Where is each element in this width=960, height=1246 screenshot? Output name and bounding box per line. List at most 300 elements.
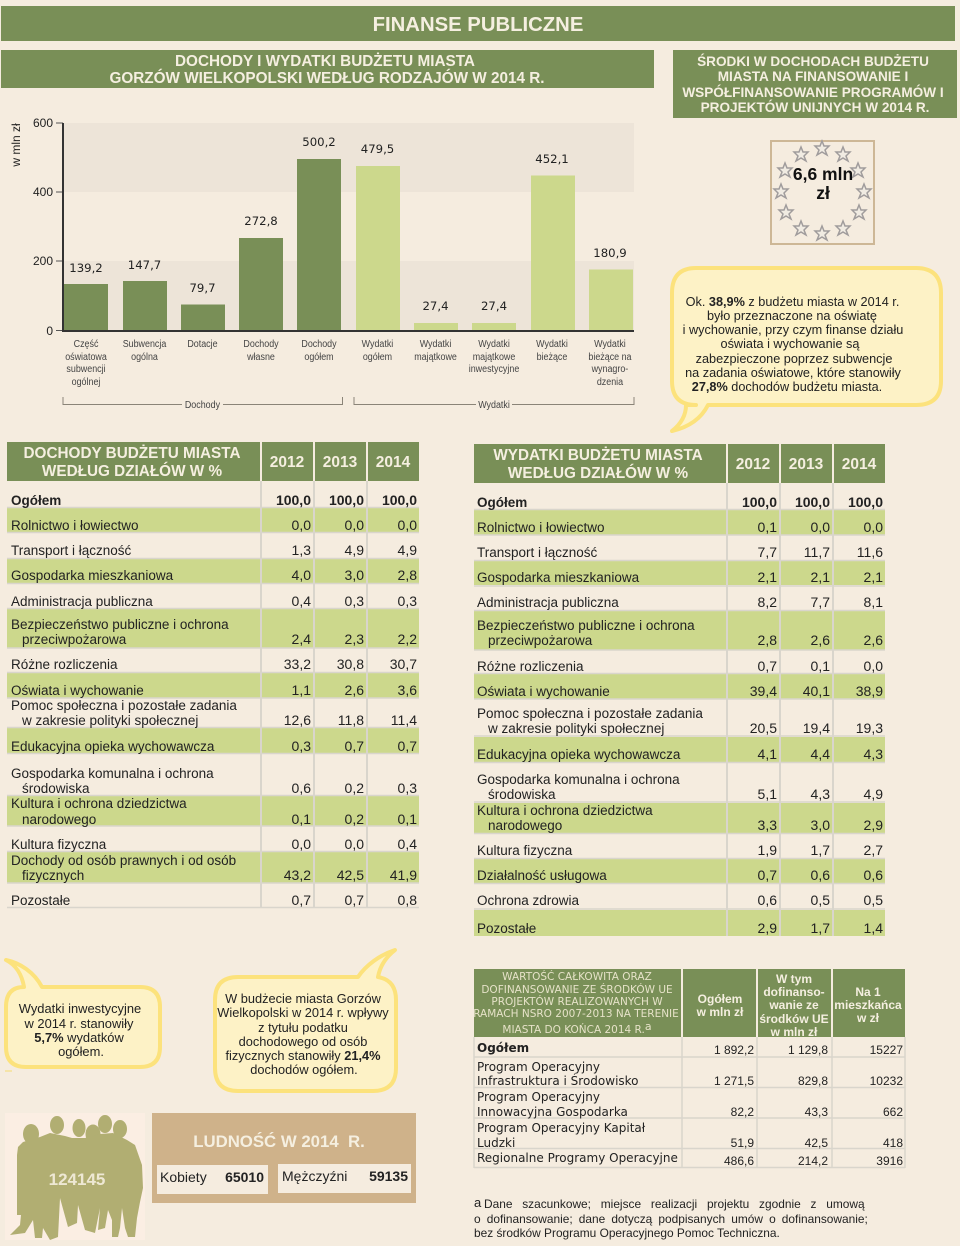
row: Różne rozliczenia: 0,1 xyxy=(811,658,830,674)
table header: WEDŁUG DZIAŁÓW W % xyxy=(42,462,222,480)
row: Kultura i ochrona: 0,1 xyxy=(292,811,311,827)
row: Bezpieczeństwo: Bezpieczeństwo publiczne i ochrona xyxy=(11,617,229,632)
table header: 2012 xyxy=(736,456,770,473)
row: Innowacyjna: 82,2 xyxy=(731,1105,754,1119)
row: Ogółem: 100,0 xyxy=(329,492,364,508)
row: Ogółem: 1 129,8 xyxy=(788,1043,828,1057)
row: Działalność usługowa: 0,6 xyxy=(811,867,830,883)
row: Infrastruktura: 1 271,5 xyxy=(714,1074,754,1088)
category labels xyxy=(65,338,632,388)
row: Gospodarka mieszkaniowa: 4,0 xyxy=(292,567,311,583)
row: Gospodarka komunalna: środowiska xyxy=(22,781,90,796)
row: Ogółem xyxy=(11,492,417,508)
row: Gospodarka mieszkaniowa: Gospodarka mieszkaniowa xyxy=(477,570,640,585)
category labels: bieżące na xyxy=(588,351,632,363)
bar values: 139,2 xyxy=(69,261,103,275)
row: Różne rozliczenia: Różne rozliczenia xyxy=(11,657,118,672)
row: Rolnictwo: 0,0 xyxy=(345,517,364,533)
men count xyxy=(278,1164,411,1193)
panel: population silhouette xyxy=(5,1113,145,1240)
bar values: 79,7 xyxy=(189,281,216,295)
bar values: 147,7 xyxy=(128,258,161,272)
row: Ogółem: 100,0 xyxy=(795,494,830,510)
row: Ochrona zdrowia: 0,5 xyxy=(864,892,883,908)
table header: 2013 xyxy=(789,456,824,473)
callout: education share xyxy=(672,268,941,431)
row: Rolnictwo: 0,0 xyxy=(292,517,311,533)
callout: income tax xyxy=(215,950,396,1091)
category labels: Wydatki xyxy=(594,338,626,350)
callout: education share: na zadania oświatowe, które stanowiły xyxy=(685,366,902,380)
bar values: 180,9 xyxy=(593,246,627,260)
row: Innowacyjna: 662 xyxy=(883,1105,903,1119)
row: Ogółem: Ogółem xyxy=(477,1041,529,1055)
row: Działalność usługowa: 0,7 xyxy=(758,867,777,883)
row: Oświata: 1,1 xyxy=(292,682,311,698)
bracket: Dochody: Dochody xyxy=(185,399,220,411)
row: Kultura fizyczna: 0,4 xyxy=(398,836,417,852)
row: Oświata xyxy=(11,682,417,698)
row: Ochrona zdrowia: Ochrona zdrowia xyxy=(477,893,580,908)
heading: EU funds: PROJEKTÓW UNIJNYCH W 2014 R. xyxy=(701,100,929,115)
row: Pozostałe xyxy=(477,920,883,936)
row: Pomoc społeczna: 19,4 xyxy=(803,720,830,736)
row: Kultura fizyczna: 0,0 xyxy=(292,836,311,852)
panel: population xyxy=(152,1113,416,1203)
row: Gospodarka mieszkaniowa xyxy=(477,569,883,585)
row: Różne rozliczenia: 30,8 xyxy=(337,656,364,672)
panel: population: LUDNOŚĆ W 2014 R. xyxy=(193,1132,365,1151)
category labels: bieżące xyxy=(537,351,567,363)
row: Innowacyjna: Program Operacyjny xyxy=(477,1090,600,1104)
table header: 2014 xyxy=(376,454,411,471)
row: Transport xyxy=(11,542,417,558)
row: Kultura i ochrona: 0,2 xyxy=(345,811,364,827)
amount: zł xyxy=(816,183,830,203)
category labels: oświatowa xyxy=(65,351,107,363)
category labels: inwestycyjne xyxy=(469,363,519,375)
row: Ogółem xyxy=(477,494,883,510)
row: Rolnictwo xyxy=(11,517,417,533)
row: Bezpieczeństwo: Bezpieczeństwo publiczne i ochrona xyxy=(477,618,695,633)
table header: 2012 xyxy=(270,454,304,471)
row: Innowacyjna: Innowacyjna Gospodarka xyxy=(477,1105,628,1119)
row: Oświata: Oświata i wychowanie xyxy=(477,684,610,699)
bracket: Dochody xyxy=(63,397,342,411)
table: expenses by section xyxy=(474,444,885,936)
table header: Ogółem xyxy=(698,992,742,1006)
callout: investment expenses: w 2014 r. stanowiły xyxy=(24,1016,134,1031)
bar values: 452,1 xyxy=(535,152,569,166)
row: Pomoc społeczna: Pomoc społeczna i pozostałe zadania xyxy=(477,706,703,721)
amount: 6,6 mln xyxy=(793,164,853,184)
row: Różne rozliczenia: 0,7 xyxy=(758,658,777,674)
heading: EU funds: MIASTA NA FINANSOWANIE I xyxy=(718,69,908,84)
row: Administracja: 8,1 xyxy=(864,594,883,610)
row: Bezpieczeństwo: 2,3 xyxy=(345,631,364,647)
category labels: Subwencja xyxy=(123,338,167,350)
table header: WEDŁUG DZIAŁÓW W % xyxy=(508,464,688,482)
row: Dochody od osób: 41,9 xyxy=(390,867,417,883)
callout: income tax: z tytułu podatku xyxy=(258,1020,348,1035)
row: Oświata: Oświata i wychowanie xyxy=(11,683,144,698)
category labels: Dochody xyxy=(243,338,279,350)
row: Transport: 4,9 xyxy=(398,542,417,558)
table header: WYDATKI BUDŻETU MIASTA xyxy=(493,447,703,464)
category labels: ogółem xyxy=(363,351,392,363)
y axis: 200 xyxy=(33,254,53,268)
row: Oświata: 3,6 xyxy=(398,682,417,698)
category labels: ogólna xyxy=(131,351,158,363)
row: Kultura i ochrona xyxy=(477,803,883,833)
category labels: Wydatki xyxy=(478,338,510,350)
category labels: Wydatki xyxy=(362,338,393,350)
row: Bezpieczeństwo: 2,6 xyxy=(811,632,830,648)
heading: EU funds: WSPÓŁFINANSOWANIE PROGRAMÓW I xyxy=(682,85,944,100)
row: Transport: Transport i łączność xyxy=(11,543,132,558)
EU stars box xyxy=(771,141,874,244)
bracket: Wydatki xyxy=(354,397,634,411)
row: Kultura fizyczna: Kultura fizyczna xyxy=(11,837,107,852)
table header: MIASTA DO KOŃCA 2014 R. xyxy=(502,1024,645,1036)
row: Ogółem: Ogółem xyxy=(477,495,527,510)
row: Transport: 7,7 xyxy=(758,544,777,560)
callout: income tax: fizycznych stanowiły 21,4% xyxy=(225,1048,381,1063)
row: Rolnictwo: 0,1 xyxy=(758,519,777,535)
callout: income tax: Wielkopolski w 2014 r. wpływy xyxy=(217,1005,389,1020)
bar chart xyxy=(9,116,634,411)
heading: income and expenses chart: DOCHODY I WYDATKI BUDŻETU MIASTA xyxy=(175,53,475,70)
men count: 59135 xyxy=(369,1168,408,1184)
row: Rolnictwo: 0,0 xyxy=(398,517,417,533)
callout: investment expenses: Wydatki inwestycyjne xyxy=(19,1001,141,1016)
row: Administracja: Administracja publiczna xyxy=(11,594,153,609)
category labels: wynagro- xyxy=(591,363,628,375)
heading: income and expenses chart xyxy=(1,50,654,88)
table: income by section xyxy=(7,442,419,908)
row: Transport: 11,7 xyxy=(804,544,830,560)
row: Edukacyjna: 0,7 xyxy=(398,738,417,754)
row: Transport: 1,3 xyxy=(292,542,311,558)
row: Działalność usługowa xyxy=(477,867,883,883)
row: Gospodarka mieszkaniowa xyxy=(11,567,417,583)
row: Edukacyjna xyxy=(11,738,417,754)
row: Dochody od osób xyxy=(11,853,417,883)
footnote: o dofinansowanie; dane dotyczą podpisanych umów o dofinansowanie; xyxy=(474,1212,868,1226)
row: Rolnictwo: 0,0 xyxy=(864,519,883,535)
row: Rolnictwo: 0,0 xyxy=(811,519,830,535)
callout: education share: i wychowanie, przy czym finanse działu xyxy=(683,323,903,337)
row: Ochrona zdrowia xyxy=(477,892,883,908)
row: Oświata: 40,1 xyxy=(803,683,830,699)
row: Pozostałe: 2,9 xyxy=(758,920,777,936)
y axis xyxy=(33,116,64,338)
row: Pozostałe: 0,7 xyxy=(345,892,364,908)
icon: group of people xyxy=(10,1115,143,1240)
row: Kultura fizyczna xyxy=(11,836,417,852)
callout: income tax: dochodowego od osób xyxy=(239,1034,367,1049)
row: Bezpieczeństwo: 2,8 xyxy=(758,632,777,648)
row: Ogółem: 100,0 xyxy=(276,492,311,508)
row: Infrastruktura: 10232 xyxy=(870,1074,903,1088)
row: Kultura fizyczna: Kultura fizyczna xyxy=(477,843,573,858)
icon: ring of stars xyxy=(774,141,871,240)
row: Edukacyjna: 4,3 xyxy=(864,746,883,762)
row: Kultura i ochrona: Kultura i ochrona dziedzictwa xyxy=(11,796,187,811)
row: Kapitał Ludzki: 42,5 xyxy=(805,1136,828,1150)
category labels: majątkowe xyxy=(414,351,457,363)
callout: education share: Ok. 38,9% z budżetu miasta w 2014 r. xyxy=(686,295,899,309)
bar values: 27,4 xyxy=(422,299,449,313)
row: Różne rozliczenia xyxy=(477,658,883,674)
row: Edukacyjna: 0,7 xyxy=(345,738,364,754)
bar values: 479,5 xyxy=(361,142,394,156)
title: FINANSE PUBLICZNE xyxy=(373,14,583,36)
row: Pomoc społeczna: w zakresie polityki społecznej xyxy=(21,713,198,728)
row: Pomoc społeczna xyxy=(11,698,417,728)
row: Transport: 4,9 xyxy=(345,542,364,558)
table header: RAMACH NSRO 2007-2013 NA TERENIE xyxy=(473,1008,679,1020)
row: Ogółem: Ogółem xyxy=(11,493,61,508)
row: Rolnictwo: Rolnictwo i łowiectwo xyxy=(477,520,605,535)
row: Regionalne: 486,6 xyxy=(724,1154,754,1168)
row: Dochody od osób: Dochody od osób prawnych i od osób xyxy=(11,853,236,868)
row: Różne rozliczenia: 33,2 xyxy=(284,656,311,672)
row: Gospodarka komunalna xyxy=(477,772,883,802)
row: Edukacyjna: 0,3 xyxy=(292,738,311,754)
row: Regionalne: 3916 xyxy=(876,1154,903,1168)
category labels: Dochody xyxy=(301,338,337,350)
table header: środków UE xyxy=(759,1012,829,1026)
row: Pozostałe xyxy=(11,892,417,908)
row: Kultura i ochrona xyxy=(11,796,417,827)
row: Bezpieczeństwo: 2,4 xyxy=(292,631,311,647)
row: Gospodarka mieszkaniowa: 2,8 xyxy=(398,567,417,583)
row: Bezpieczeństwo: 2,2 xyxy=(398,631,417,647)
row: Infrastruktura: 829,8 xyxy=(798,1074,828,1088)
callout: income tax: W budżecie miasta Gorzów xyxy=(225,991,382,1006)
row: Administracja: 8,2 xyxy=(758,594,777,610)
row: Kapitał Ludzki: 418 xyxy=(883,1136,903,1150)
row: Gospodarka komunalna xyxy=(11,766,417,796)
row: Gospodarka mieszkaniowa: 2,1 xyxy=(758,569,777,585)
row: Gospodarka komunalna: Gospodarka komunalna i ochrona xyxy=(477,772,680,787)
callout: education share: zabezpieczone poprzez subwencje xyxy=(696,352,892,366)
bar values xyxy=(69,135,627,313)
row: Gospodarka mieszkaniowa: Gospodarka mieszkaniowa xyxy=(11,568,174,583)
category labels: ogólnej xyxy=(72,376,100,388)
row: Infrastruktura xyxy=(477,1060,903,1088)
callout: income tax: dochodów ogółem. xyxy=(250,1062,358,1077)
row: Regionalne: 214,2 xyxy=(798,1154,828,1168)
row: Rolnictwo: Rolnictwo i łowiectwo xyxy=(11,518,139,533)
row: Ogółem: 15227 xyxy=(870,1043,903,1057)
row: Pozostałe: 0,7 xyxy=(292,892,311,908)
callout: education share: było przeznaczone na oświatę xyxy=(707,309,877,323)
row: Edukacyjna: 4,4 xyxy=(811,746,830,762)
row: Ogółem: 100,0 xyxy=(382,492,417,508)
footnote: a xyxy=(474,1195,482,1210)
callout: investment expenses: 5,7% wydatków xyxy=(34,1030,124,1045)
table header: Na 1 xyxy=(855,985,881,999)
row: Różne rozliczenia: 30,7 xyxy=(390,656,417,672)
row: Regionalne: Regionalne Programy Operacyjne xyxy=(477,1151,678,1165)
row: Pozostałe: 1,4 xyxy=(864,920,883,936)
category labels: Wydatki xyxy=(420,338,451,350)
row: Innowacyjna xyxy=(477,1090,903,1119)
row: Innowacyjna: 43,3 xyxy=(805,1105,828,1119)
row: Bezpieczeństwo xyxy=(477,618,883,648)
table: EU projects xyxy=(473,969,905,1168)
row: Ogółem xyxy=(477,1041,903,1057)
table header: W tym xyxy=(776,972,812,986)
men count: Mężczyźni xyxy=(282,1168,347,1184)
panel: population silhouette: 124145 xyxy=(49,1170,105,1189)
y axis: 600 xyxy=(33,116,53,130)
row: Administracja: 0,4 xyxy=(292,593,311,609)
row: Pomoc społeczna xyxy=(477,706,883,736)
row: Edukacyjna xyxy=(477,746,883,762)
row: Kultura fizyczna: 1,7 xyxy=(811,842,830,858)
row: Edukacyjna: Edukacyjna opieka wychowawcza xyxy=(477,747,681,762)
row: Kultura fizyczna: 1,9 xyxy=(758,842,777,858)
row: Ochrona zdrowia: 0,6 xyxy=(758,892,777,908)
row: Administracja: 0,3 xyxy=(398,593,417,609)
table header: PROJEKTÓW REALIZOWANYCH W xyxy=(491,995,663,1008)
table header: mieszkańca xyxy=(834,998,902,1012)
row: Ogółem: 100,0 xyxy=(848,494,883,510)
row: Gospodarka mieszkaniowa: 2,1 xyxy=(864,569,883,585)
table header: DOFINANSOWANIE ZE ŚRODKÓW UE xyxy=(481,983,673,996)
row: Bezpieczeństwo: przeciwpożarowa xyxy=(22,632,127,647)
row: Administracja xyxy=(477,594,883,610)
row: Pomoc społeczna: 11,8 xyxy=(338,712,364,728)
row: Oświata: 2,6 xyxy=(345,682,364,698)
y axis: 0 xyxy=(46,324,53,338)
heading: EU funds xyxy=(673,50,957,118)
table header xyxy=(7,442,419,481)
row: Gospodarka komunalna: 4,3 xyxy=(811,786,830,802)
row: Gospodarka komunalna: 0,2 xyxy=(345,780,364,796)
row: Oświata: 38,9 xyxy=(856,683,883,699)
footnote: Dane szacunkowe; miejsce realizacji projektu zgodnie z umową xyxy=(484,1197,865,1211)
row: Działalność usługowa: Działalność usługowa xyxy=(477,868,607,883)
row: Gospodarka komunalna: 0,3 xyxy=(398,780,417,796)
title xyxy=(1,6,955,41)
callout: investment expenses: ogółem. xyxy=(58,1044,104,1059)
row: Kultura fizyczna: 0,0 xyxy=(345,836,364,852)
table header: wanie ze xyxy=(768,998,819,1012)
table header: WARTOŚĆ CAŁKOWITA ORAZ xyxy=(502,970,652,983)
y axis title: w mln zł xyxy=(9,123,23,168)
row: Pomoc społeczna: 20,5 xyxy=(750,720,777,736)
table header xyxy=(474,444,885,483)
table header: w mln zł xyxy=(696,1005,744,1019)
heading: income and expenses chart: GORZÓW WIELKOPOLSKI WEDŁUG RODZAJÓW W 2014 R. xyxy=(109,69,545,87)
row: Oświata: 39,4 xyxy=(750,683,777,699)
category labels: Wydatki xyxy=(536,338,568,350)
row: Bezpieczeństwo xyxy=(11,617,417,647)
row: Transport: Transport i łączność xyxy=(477,545,598,560)
amount xyxy=(793,164,853,203)
row: Administracja xyxy=(11,593,417,609)
row: Pomoc społeczna: 11,4 xyxy=(391,712,417,728)
row: Kapitał Ludzki: Ludzki xyxy=(477,1136,515,1150)
row: Ogółem: 100,0 xyxy=(742,494,777,510)
row: Gospodarka mieszkaniowa: 2,1 xyxy=(811,569,830,585)
category labels: dzenia xyxy=(597,376,624,388)
women count xyxy=(157,1165,268,1194)
row: Pomoc społeczna: w zakresie polityki społecznej xyxy=(487,721,664,736)
table header: 2014 xyxy=(842,456,877,473)
bar values: 500,2 xyxy=(302,135,336,149)
category labels: majątkowe xyxy=(473,351,515,363)
table header: w mln zł xyxy=(770,1025,818,1039)
row: Pozostałe: Pozostałe xyxy=(477,921,536,936)
row: Kultura i ochrona: 3,0 xyxy=(811,817,830,833)
callout: education share: oświata i wychowanie są xyxy=(721,337,860,351)
table header: dofinanso- xyxy=(763,985,825,999)
row: Kultura i ochrona: 0,1 xyxy=(398,811,417,827)
bracket: Wydatki: Wydatki xyxy=(478,399,510,411)
row: Pomoc społeczna: 19,3 xyxy=(856,720,883,736)
row: Bezpieczeństwo: 2,6 xyxy=(864,632,883,648)
row: Administracja: Administracja publiczna xyxy=(477,595,619,610)
row: Ochrona zdrowia: 0,5 xyxy=(811,892,830,908)
row: Regionalne xyxy=(477,1151,903,1168)
row: Pozostałe: 0,8 xyxy=(398,892,417,908)
row: Transport: 11,6 xyxy=(857,544,883,560)
row: Gospodarka komunalna: 5,1 xyxy=(758,786,777,802)
row: Kultura fizyczna xyxy=(477,842,883,858)
row: Kapitał Ludzki: 51,9 xyxy=(731,1136,754,1150)
bar values: 27,4 xyxy=(481,299,507,313)
row: Administracja: 7,7 xyxy=(811,594,830,610)
row: Edukacyjna: 4,1 xyxy=(758,746,777,762)
table header: a xyxy=(645,1020,652,1033)
row: Dochody od osób: 42,5 xyxy=(337,867,364,883)
row: Różne rozliczenia xyxy=(11,656,417,672)
row: Kultura i ochrona: Kultura i ochrona dziedzictwa xyxy=(477,803,653,818)
women count: 65010 xyxy=(225,1169,264,1185)
heading: EU funds: ŚRODKI W DOCHODACH BUDŻETU xyxy=(697,54,929,69)
row: Infrastruktura: Program Operacyjny xyxy=(477,1060,600,1074)
category labels: Część xyxy=(74,338,99,350)
row: Gospodarka komunalna: Gospodarka komunalna i ochrona xyxy=(11,766,214,781)
row: Transport xyxy=(477,544,883,560)
row: Pozostałe: 1,7 xyxy=(811,920,830,936)
row: Pomoc społeczna: Pomoc społeczna i pozostałe zadania xyxy=(11,698,237,713)
row: Gospodarka komunalna: 0,6 xyxy=(292,780,311,796)
row: Pomoc społeczna: 12,6 xyxy=(284,712,311,728)
row: Kapitał Ludzki xyxy=(477,1121,903,1150)
row: Różne rozliczenia: Różne rozliczenia xyxy=(477,659,584,674)
row: Gospodarka komunalna: środowiska xyxy=(488,787,556,802)
table header: 2013 xyxy=(323,454,358,471)
row: Kultura fizyczna: 2,7 xyxy=(864,842,883,858)
category labels: ogółem xyxy=(304,351,334,363)
row: Oświata xyxy=(477,683,883,699)
women count: Kobiety xyxy=(160,1169,207,1185)
callout: investment expenses xyxy=(5,960,160,1072)
row: Kapitał Ludzki: Program Operacyjny Kapitał xyxy=(477,1121,646,1135)
row: Bezpieczeństwo: przeciwpożarowa xyxy=(488,633,593,648)
category labels: Dotacje xyxy=(187,338,218,350)
row: Pozostałe: Pozostałe xyxy=(11,893,70,908)
row: Kultura i ochrona: narodowego xyxy=(488,818,562,833)
row: Kultura i ochrona: 2,9 xyxy=(864,817,883,833)
row: Administracja: 0,3 xyxy=(345,593,364,609)
